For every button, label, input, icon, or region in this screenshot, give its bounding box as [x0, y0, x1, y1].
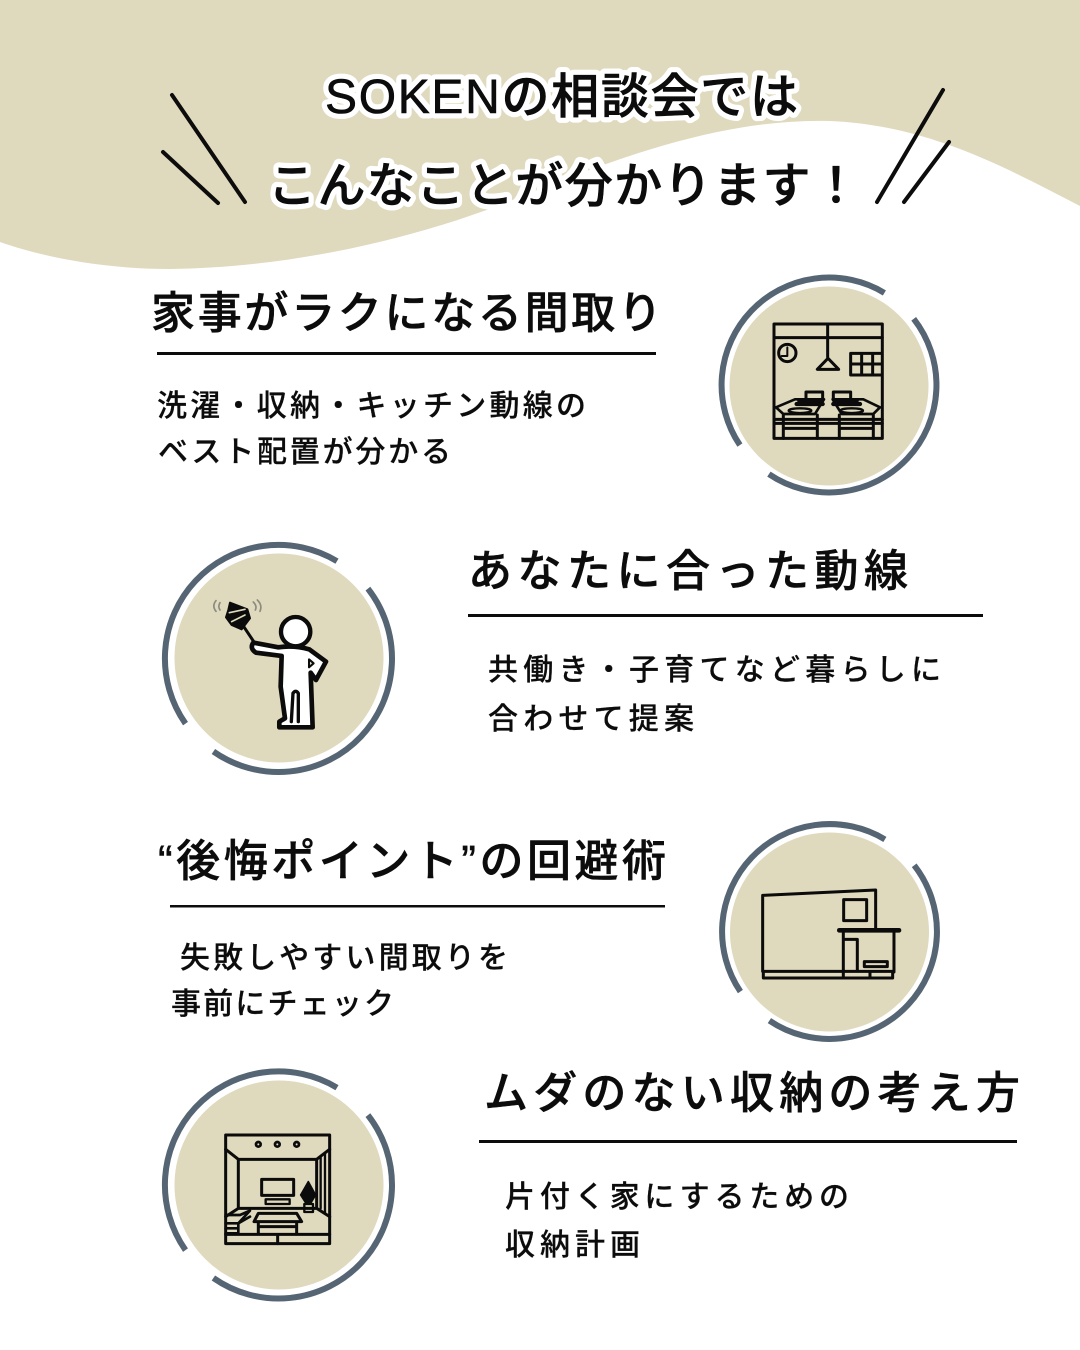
section 3 body [171, 942, 508, 1021]
section 3 rule [170, 905, 665, 908]
section 2 rule [468, 614, 983, 617]
accent lines left [163, 95, 245, 203]
section 4 body: 収納計画 [505, 1229, 640, 1262]
icon 2: person cleaning [165, 545, 392, 772]
title line 2: こんなことが分かります！ [268, 160, 860, 213]
section 3 body: 事前にチェック [171, 988, 394, 1021]
section 4 rule [479, 1140, 1017, 1143]
section 1 heading: 家事がラクになる間取り [151, 289, 662, 338]
section 2 heading: あなたに合った動線 [468, 547, 908, 596]
section 2 body: 共働き・子育てなど暮らしに [488, 654, 941, 687]
icon 3: house [722, 824, 937, 1039]
section 1 body: ベスト配置が分かる [158, 436, 451, 469]
section 4 body [505, 1181, 849, 1262]
section 1 rule [157, 352, 656, 355]
title line 1: SOKENの相談会では [325, 71, 798, 124]
section 1 body: 洗濯・収納・キッチン動線の [157, 390, 586, 423]
section 3 body: 失敗しやすい間取りを [180, 942, 508, 975]
accent lines right [877, 90, 949, 202]
section 2 body: 合わせて提案 [488, 703, 694, 736]
section 4 heading: ムダのない収納の考え方 [484, 1069, 1020, 1118]
title line 1: SOKENの相談会では [325, 71, 798, 124]
section 4 body: 片付く家にするための [505, 1181, 849, 1214]
section 2 body [488, 654, 941, 736]
icon 1: kitchen [722, 278, 936, 492]
title line 2: こんなことが分かります！ [268, 160, 860, 213]
icon 4: living room [165, 1071, 392, 1299]
title [268, 71, 860, 213]
section 3 heading: “後悔ポイント”の回避術 [158, 837, 666, 886]
background wave [0, 0, 1080, 269]
section 1 body [157, 390, 586, 469]
